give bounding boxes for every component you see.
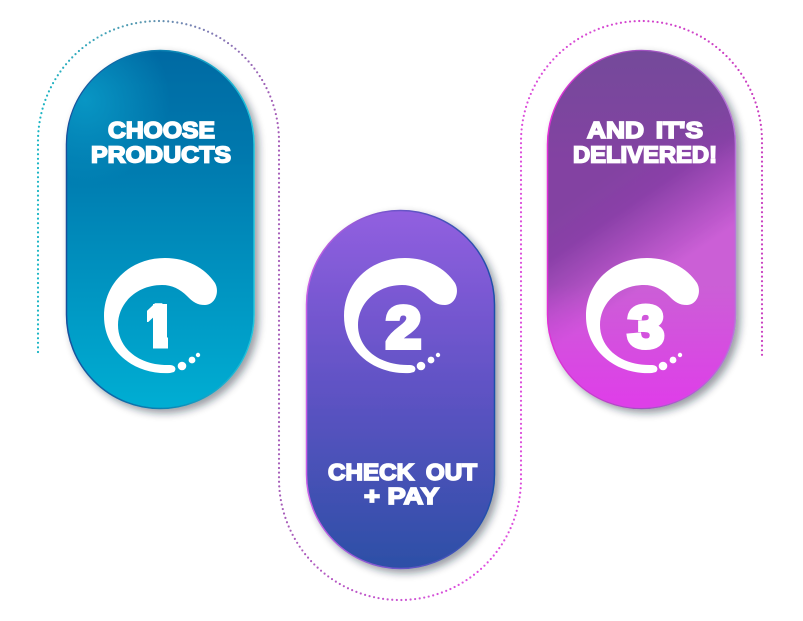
- heading: and it's delivered: AND IT'S: [587, 117, 703, 143]
- icon: swoosh ring with number 2: 2: [386, 296, 421, 360]
- pill 2 background: [306, 210, 494, 568]
- heading: choose products: CHOOSE: [108, 117, 215, 143]
- pill 1 background: [66, 50, 254, 408]
- pill 3 top shade: [548, 51, 734, 241]
- icon: swoosh ring with number 2: [344, 258, 457, 373]
- icon: swoosh ring with number 3: 3: [628, 295, 664, 360]
- heading: check out + pay: [328, 459, 478, 509]
- pill 3 bottom glow: [548, 200, 734, 408]
- icon: swoosh ring with number 3: [586, 258, 699, 373]
- icon: swoosh ring with number 1: [104, 258, 217, 373]
- icon: swoosh ring with number 1: 1: [146, 294, 168, 359]
- heading: choose products: [91, 117, 231, 168]
- pill 3 background: [548, 50, 736, 408]
- heading: and it's delivered: DELIVERED!: [573, 142, 717, 168]
- heading: choose products: PRODUCTS: [91, 142, 231, 168]
- panel: step 1 choose products: [66, 50, 254, 408]
- panel: step 2 check out and pay: [306, 210, 494, 568]
- pill 1 highlight: [67, 51, 253, 251]
- heading: check out + pay: + PAY: [364, 483, 439, 509]
- heading: and it's delivered: [573, 117, 717, 168]
- panel: step 3 delivered: [548, 50, 736, 408]
- heading: check out + pay: CHECK OUT: [328, 459, 478, 485]
